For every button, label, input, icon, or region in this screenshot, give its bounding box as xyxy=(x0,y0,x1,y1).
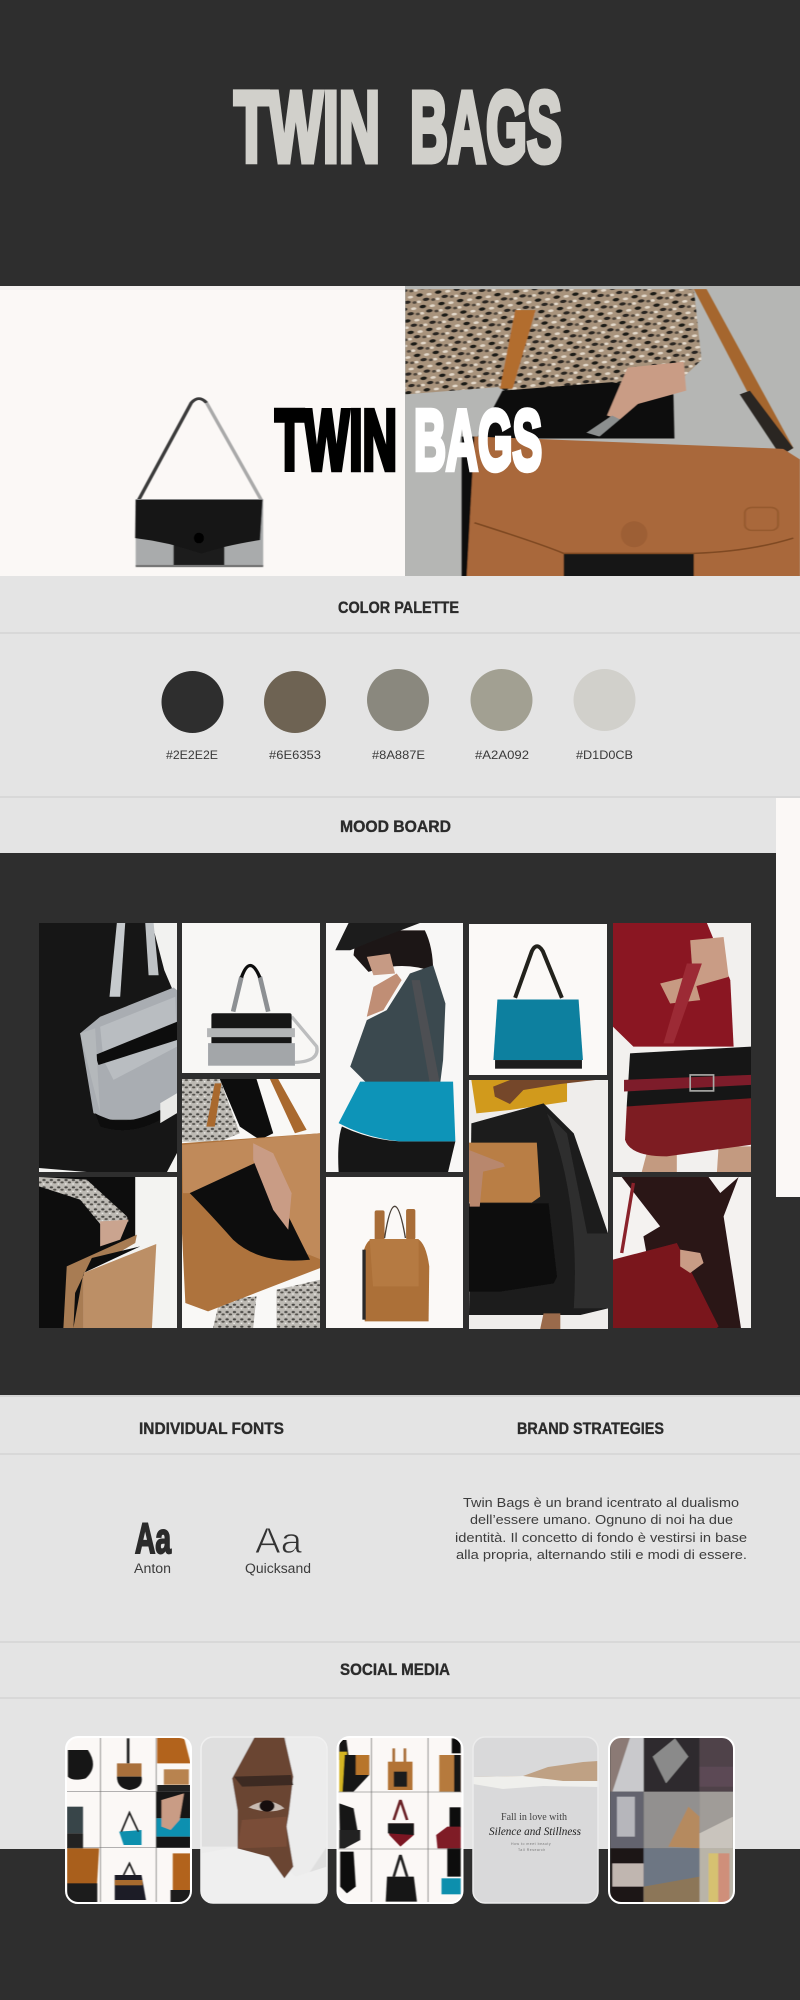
heading: color palette: COLOR PALETTE xyxy=(338,599,459,617)
swatch 4 xyxy=(470,669,532,762)
font sample: Anton: Aa xyxy=(135,1515,172,1563)
font sample: Anton xyxy=(134,1515,172,1576)
swatch 5 xyxy=(574,669,636,762)
photo: red velvet jacket with belted bag xyxy=(613,923,751,1172)
panel: title header xyxy=(0,0,800,286)
paragraph: brand description xyxy=(455,1495,747,1562)
swatch 5: #D1D0CB xyxy=(576,748,633,762)
photo: tan backpack xyxy=(326,1177,463,1328)
photo: teal handbag xyxy=(469,924,607,1075)
heading: social media: SOCIAL MEDIA xyxy=(340,1661,450,1679)
post 4: silence and stillness quote xyxy=(473,1737,598,1903)
title: BAGS xyxy=(410,72,562,184)
heading: mood board: MOOD BOARD xyxy=(340,818,451,836)
photo: model with teal bag xyxy=(326,923,463,1172)
heading: individual fonts: INDIVIDUAL FONTS xyxy=(139,1420,284,1438)
panel: individual fonts xyxy=(0,1395,800,1642)
paragraph: brand description: identità. Il concetto di fondo è vestirsi in base xyxy=(455,1530,747,1545)
post 1: bag grid xyxy=(66,1737,191,1903)
post 3: bag grid xyxy=(338,1737,462,1903)
font sample: Quicksand: Aa xyxy=(255,1520,303,1561)
photo: tan tote with black lining xyxy=(182,1079,320,1328)
photo: black and grey shoulder bag xyxy=(134,397,264,568)
swatch 4: #A2A092 xyxy=(475,748,529,762)
swatch 2 xyxy=(264,671,326,762)
swatch 1: #2E2E2E xyxy=(166,748,218,762)
swatch 1 xyxy=(162,671,224,762)
post 4: silence and stillness quote: Fall in love with xyxy=(501,1811,567,1823)
panel: hero xyxy=(0,286,800,576)
post 4: silence and stillness quote: Silence and Stillness xyxy=(489,1824,581,1838)
panel: brand strategies xyxy=(455,1420,747,1562)
photo: grey bag on pinstripe jacket xyxy=(39,923,177,1172)
swatch 3: #8A887E xyxy=(372,748,425,762)
swatch 2: #6E6353 xyxy=(269,748,321,762)
swatch 3 xyxy=(367,669,429,762)
post 5: textured collage xyxy=(609,1737,734,1903)
post 2: torn paper eye xyxy=(201,1737,327,1904)
paragraph: brand description: dell’essere umano. Ognuno di noi ha due xyxy=(470,1512,733,1527)
photo: model with tan bag xyxy=(405,286,800,576)
font sample: Quicksand xyxy=(245,1520,311,1576)
photo: maroon dress with red bag xyxy=(613,1177,751,1328)
panel: color palette xyxy=(0,576,800,798)
photo: black and grey belted bag xyxy=(182,923,320,1073)
hero wordmark: TWIN xyxy=(275,394,397,488)
post 4: silence and stillness quote: How to meet beauty xyxy=(511,1842,551,1846)
panel: social media xyxy=(0,1641,800,2000)
paragraph: brand description: Twin Bags è un brand icentrato al dualismo xyxy=(463,1495,739,1510)
hero wordmark: BAGS xyxy=(414,394,542,488)
font sample: Quicksand: Quicksand xyxy=(245,1561,311,1576)
paragraph: brand description: alla propria, alternando stili e modi di essere. xyxy=(456,1547,747,1562)
panel: mood board xyxy=(0,798,800,1395)
font sample: Anton: Anton xyxy=(134,1561,171,1576)
photo: black leather skirt with tan pouch xyxy=(469,1080,608,1329)
title: TWIN xyxy=(234,72,380,184)
post 4: silence and stillness quote: Tall Research xyxy=(518,1848,546,1852)
heading: brand strategies: BRAND STRATEGIES xyxy=(517,1420,664,1438)
photo: model holding tan bag xyxy=(39,1177,177,1328)
